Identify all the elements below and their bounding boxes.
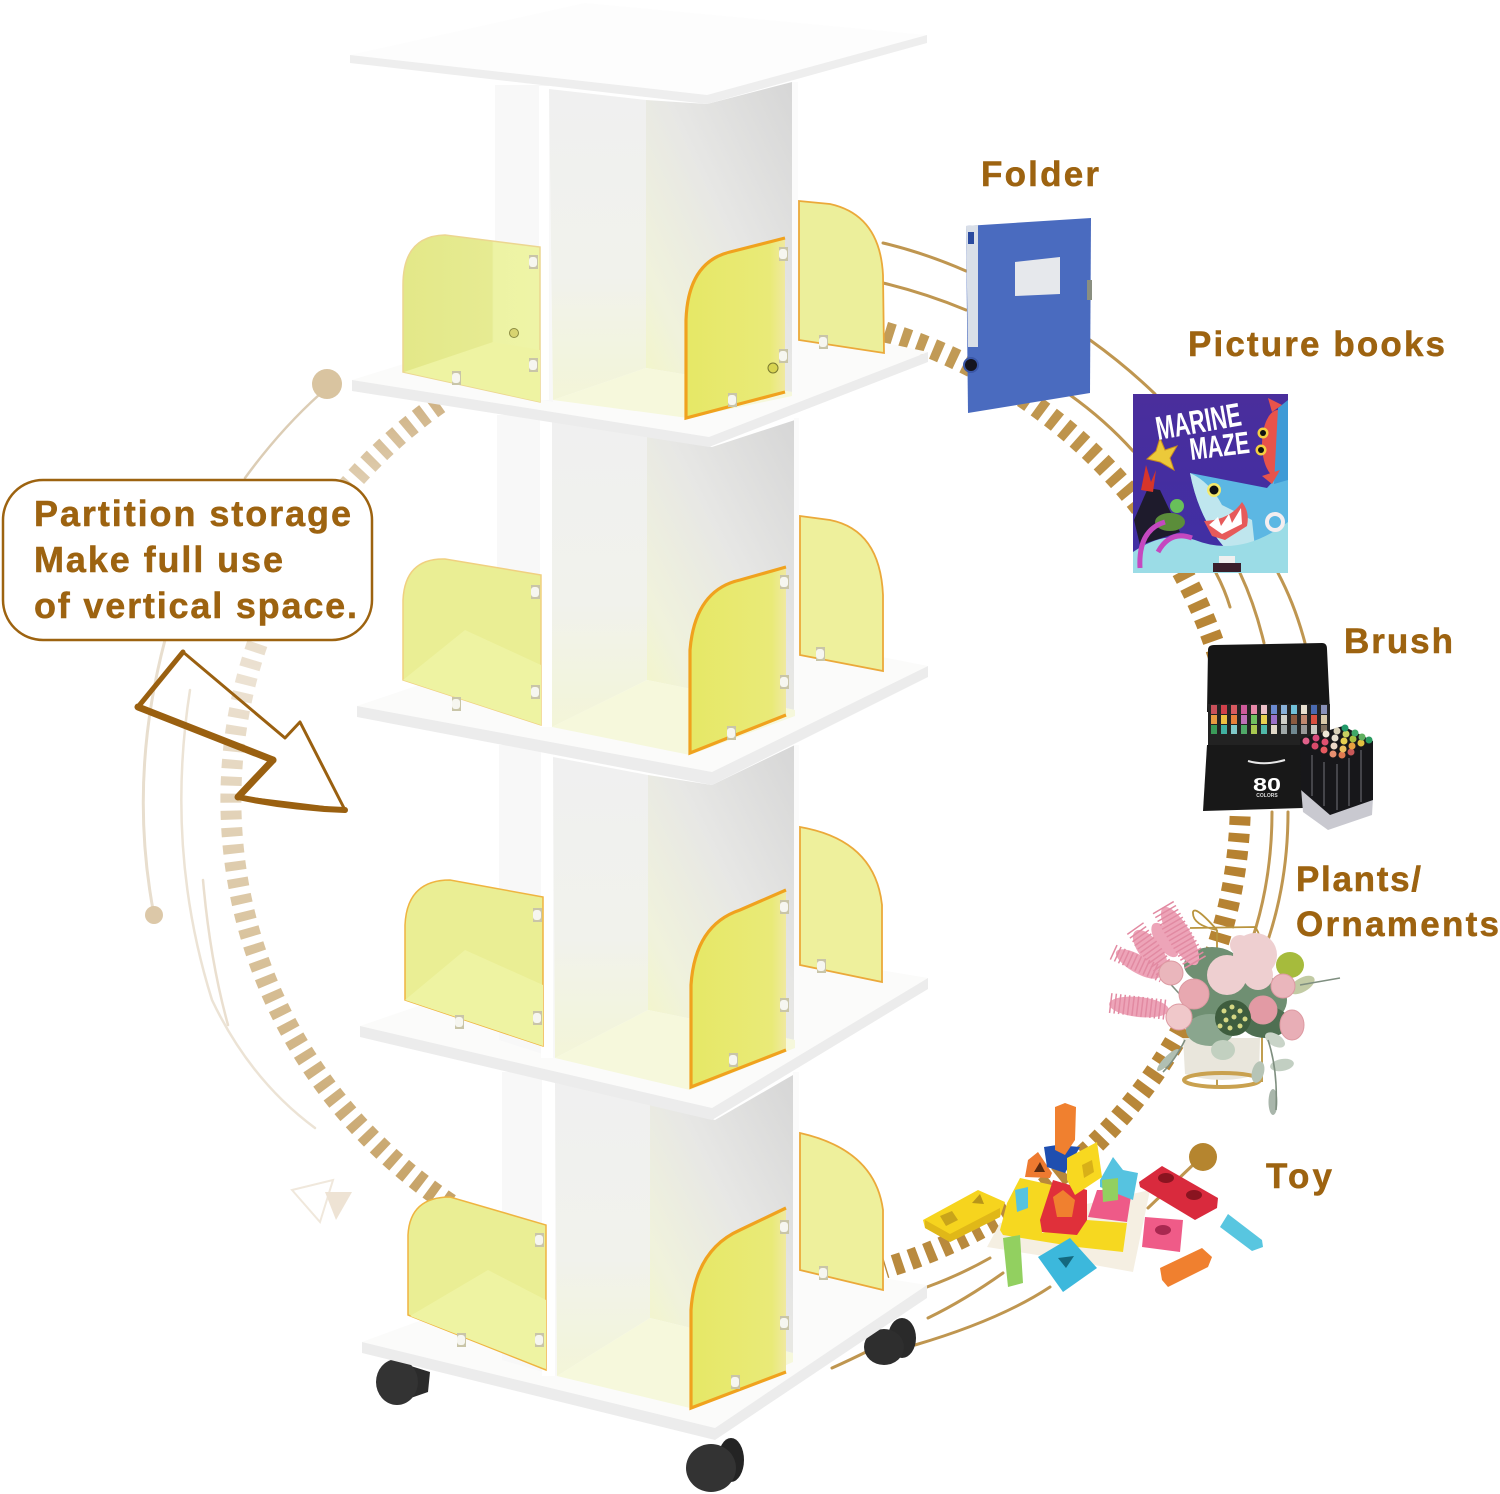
section 3 [360, 745, 928, 1120]
case caption: COLORS [1256, 793, 1278, 799]
label: Folder: Folder [981, 155, 1099, 194]
callout: partition storage [3, 480, 372, 640]
toy cyan rhomb [1038, 1238, 1097, 1292]
dot: lower left arc end [145, 906, 163, 924]
toy wooden base [987, 1190, 1150, 1272]
toy red block [1040, 1180, 1087, 1235]
callout text [34, 493, 357, 626]
toy loose yellow block [923, 1190, 1005, 1242]
toy loose orange [1160, 1248, 1212, 1287]
dashed ring: right arc [885, 332, 1240, 1268]
book title [1156, 403, 1250, 460]
column right panel [646, 82, 792, 392]
icon: faint triangles [292, 1180, 352, 1222]
dot: upper left arc end [312, 369, 342, 399]
toy cyan pieces [1100, 1157, 1138, 1200]
toy blue block [1044, 1145, 1080, 1173]
thin arcs: left side [143, 394, 320, 1128]
marker case lid [1207, 643, 1330, 712]
icon: potted flowers [1108, 902, 1340, 1115]
front acrylic divider [691, 1208, 789, 1408]
callout text: of vertical space. [34, 585, 357, 626]
toy pink block [1088, 1190, 1132, 1222]
label: Picture books: Picture books [1188, 325, 1445, 364]
column centre panel [552, 418, 647, 727]
column centre panel [555, 1083, 650, 1376]
column right panel [650, 1075, 793, 1353]
dot: toy arc end [1189, 1143, 1217, 1171]
column inner edge [541, 752, 553, 1058]
caster: left [376, 1359, 430, 1405]
label: Plants/ Ornaments [1296, 860, 1499, 944]
floor tint [553, 368, 792, 418]
label: Plants/ Ornaments: Ornaments [1296, 905, 1499, 944]
toy orange triangle block [1025, 1152, 1052, 1178]
column inner edge [540, 418, 552, 727]
toy yellow square ring [1067, 1142, 1102, 1195]
icon: picture book Marine Maze [1133, 394, 1294, 573]
shelf 1 [352, 290, 928, 447]
caster: right [864, 1318, 916, 1365]
column right panel [648, 745, 795, 1040]
left acrylic divider [405, 880, 543, 1046]
dashed ring: left arc [231, 403, 450, 1204]
ranunculus blooms [1159, 961, 1304, 1040]
stems [1135, 945, 1340, 1110]
left acrylic divider [403, 235, 540, 402]
toy small cyan [1015, 1187, 1028, 1212]
label: Plants/ Ornaments: Plants/ [1296, 860, 1421, 899]
hydrangea bloom [1207, 933, 1277, 995]
column inner edge [539, 86, 549, 400]
marker case front [1203, 745, 1330, 811]
top board [350, 3, 927, 104]
section 1: top tier [352, 82, 928, 447]
case number: 80 [1253, 775, 1281, 795]
clip on back divider [817, 959, 826, 973]
book turtle [1155, 499, 1185, 531]
column right edge [793, 1072, 799, 1354]
toy yellow base blocks [1000, 1178, 1127, 1252]
left acrylic divider [408, 1197, 546, 1370]
back right acrylic divider [800, 827, 882, 982]
book ocean [1133, 522, 1288, 573]
clip on back divider [819, 1266, 828, 1280]
column back strip [502, 1072, 557, 1376]
section 4: bottom tier [362, 1072, 927, 1440]
column inner edge [542, 1078, 555, 1376]
foliage [1155, 947, 1318, 1115]
pot base ring [1184, 1073, 1260, 1087]
book title: MAZE [1188, 425, 1251, 467]
arrow: hand-drawn pointing down right [138, 652, 345, 810]
thin arcs: right side [832, 243, 1305, 1368]
back right acrylic divider [800, 516, 883, 671]
icon: wooden shape toy [923, 1103, 1263, 1292]
back right acrylic divider [800, 1133, 883, 1290]
clip on back divider [816, 647, 825, 661]
book crab [1256, 398, 1288, 484]
pot [1183, 1038, 1260, 1080]
case brand mark [1248, 760, 1285, 763]
book volcano [1134, 488, 1180, 545]
callout text: Partition storage [34, 493, 351, 534]
toy small orange [1053, 1190, 1075, 1217]
clip on back divider [819, 335, 828, 349]
floor tint [557, 1318, 793, 1408]
front acrylic divider [691, 890, 789, 1087]
toy front green peg [1003, 1235, 1023, 1287]
book shark [1190, 473, 1288, 546]
section 2 [357, 415, 928, 785]
callout text: Make full use [34, 539, 283, 580]
toy cyan pointer [1220, 1214, 1263, 1251]
lavender sprigs [1108, 902, 1206, 1020]
label: Toy: Toy [1266, 1157, 1333, 1196]
marker caps, large set [1208, 704, 1330, 746]
book star [1147, 438, 1177, 470]
column back strip [499, 745, 555, 1058]
small marker set [1300, 724, 1373, 830]
column right panel [647, 420, 795, 710]
caster: front [686, 1438, 744, 1492]
column back strip [497, 415, 552, 727]
column right edge [794, 418, 799, 712]
left acrylic divider [403, 559, 541, 725]
book title: MARINE [1153, 396, 1244, 447]
base shelf [362, 1240, 927, 1440]
front acrylic divider [690, 567, 789, 753]
column back strip [495, 85, 553, 402]
gold wire frame [1190, 910, 1262, 1088]
column right edge [792, 82, 798, 394]
book life ring [1267, 514, 1283, 530]
toy loose pink block [1142, 1217, 1183, 1252]
book octopus tentacles [1140, 522, 1192, 568]
shelf 2 [357, 610, 928, 785]
toy loose red block [1139, 1166, 1218, 1220]
back right acrylic divider [799, 201, 884, 353]
column centre panel [549, 89, 646, 400]
front acrylic divider [686, 238, 788, 418]
rotating bookshelf tower [350, 3, 928, 1492]
column centre panel [553, 757, 648, 1058]
toy orange tall post [1055, 1103, 1076, 1155]
book ship [1213, 556, 1241, 572]
toy green peg [1102, 1178, 1118, 1202]
label: Brush: Brush [1344, 622, 1453, 661]
floor tint [555, 1010, 795, 1090]
icon: blue folder [964, 218, 1092, 413]
floor tint [552, 680, 795, 755]
green berry cluster [1215, 1000, 1251, 1036]
column right edge [794, 745, 799, 1042]
icon: marker set [1203, 643, 1373, 830]
shelf 3 [360, 930, 928, 1120]
